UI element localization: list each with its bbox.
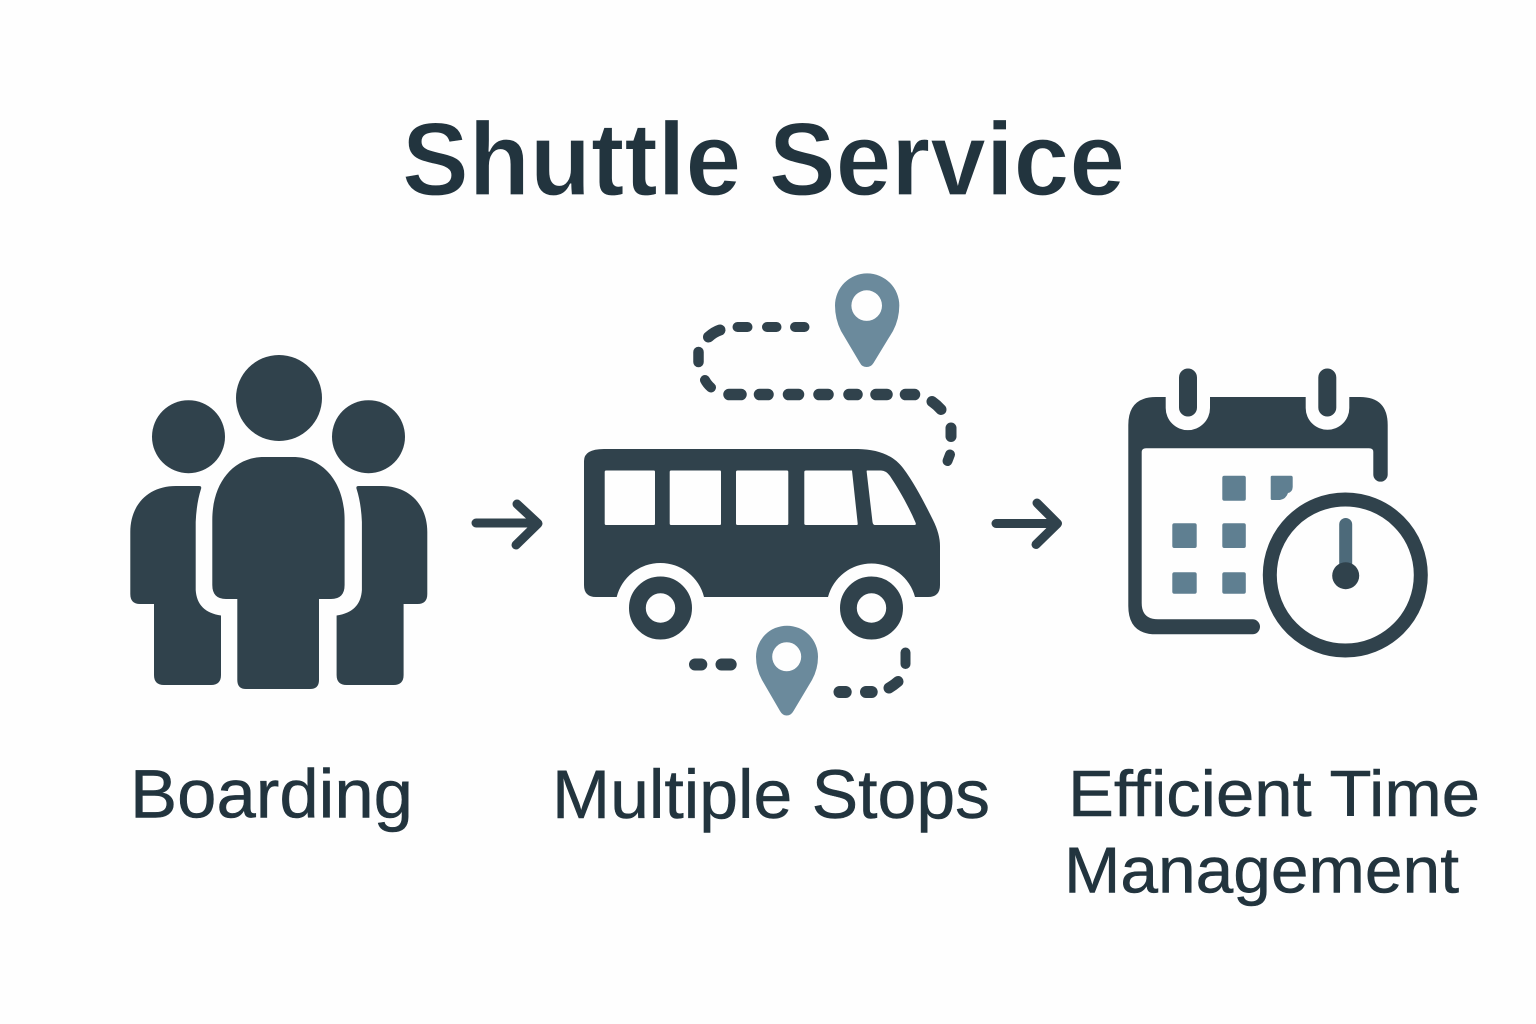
bottom dashed route	[695, 652, 906, 692]
right person body	[337, 486, 427, 685]
top dashed route	[698, 327, 951, 461]
arrow: boarding to stops	[476, 504, 538, 545]
clock hand	[1339, 524, 1352, 572]
bottom location pin	[756, 626, 818, 716]
top location pin	[835, 273, 899, 367]
label: boarding: Boarding	[130, 756, 413, 832]
bus body	[584, 449, 940, 597]
icon: bus with route and stops	[584, 273, 951, 716]
right person head	[332, 400, 405, 473]
calendar day squares	[1172, 476, 1293, 594]
icon: calendar with clock	[1128, 378, 1421, 650]
clock face	[1270, 500, 1421, 650]
label line one: Efficient Time	[1068, 757, 1480, 830]
right wheel	[848, 585, 895, 631]
calendar frame	[1128, 397, 1388, 634]
title: Shuttle Service	[402, 102, 1125, 218]
center person head	[236, 355, 322, 441]
label: efficient time management	[1064, 757, 1480, 906]
label: multiple stops: Multiple Stops	[552, 756, 990, 833]
left person body	[130, 486, 221, 685]
center person body	[212, 457, 345, 689]
left person head	[152, 400, 225, 473]
label line two: Management	[1064, 834, 1459, 906]
icon: group of people boarding	[130, 355, 427, 689]
left wheel	[637, 585, 684, 631]
arrow: stops to time	[996, 503, 1058, 544]
calendar rings	[1188, 378, 1327, 408]
clock hub	[1332, 562, 1359, 589]
